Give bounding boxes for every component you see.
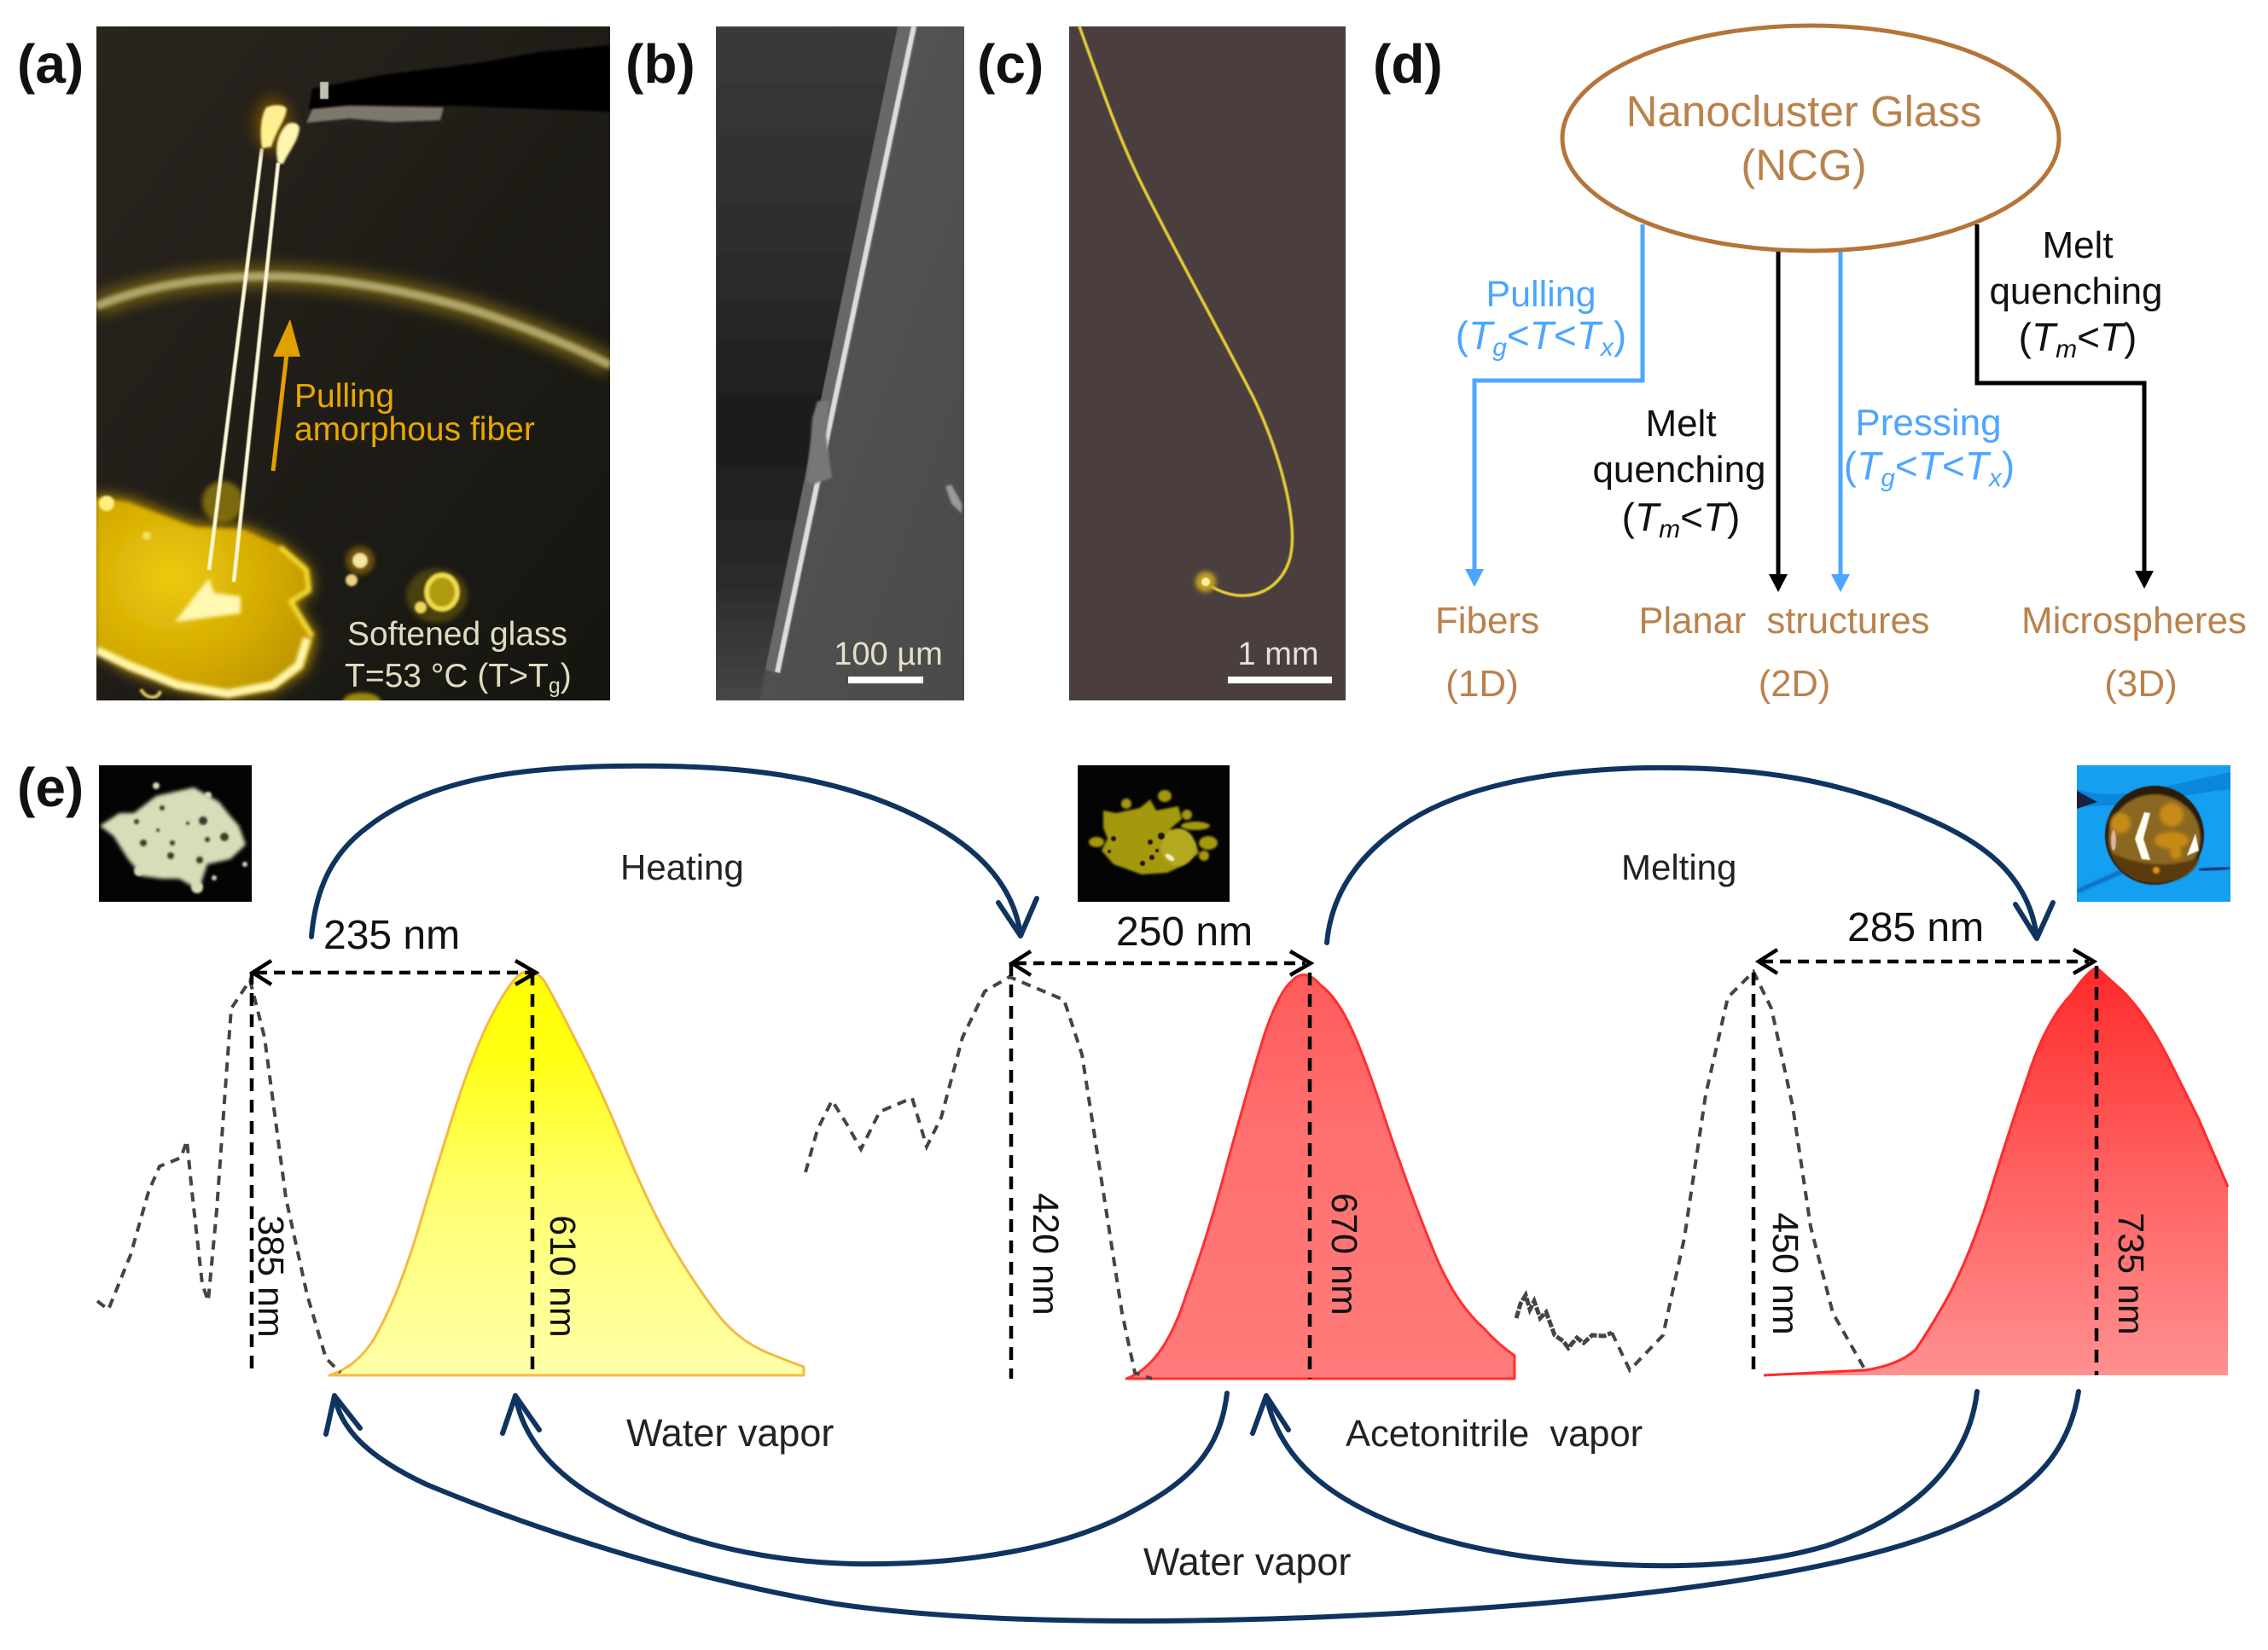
output: fibers 1D: (1D) (1445, 663, 1519, 705)
thumbnail: glass disc on blue glove (2077, 765, 2230, 902)
panel label (a): (a) (17, 33, 84, 95)
arrow: pulling direction (273, 319, 300, 471)
annotation: pulling amorphous fiber: amorphous fiber (294, 411, 535, 448)
label: 250 nm: 250 nm (1116, 909, 1253, 955)
ellipse: Nanocluster Glass: Nanocluster Glass (1626, 87, 1981, 136)
label: pulling condition: (T (1456, 313, 1492, 357)
arrow: melt quenching to microspheres (1977, 224, 2154, 589)
arrow: pressing to planar structures (1831, 252, 1850, 592)
panel d: NCG processing flowchart (1435, 26, 2247, 705)
label: melt quenching left: Melt (1645, 403, 1717, 444)
label: pulling condition: g (1492, 334, 1507, 362)
label: pressing condition: ) (2002, 444, 2015, 488)
arrow: melting (1327, 768, 2053, 943)
scale bar 1 mm (1228, 642, 1332, 683)
scale bar 1 mm: 1 mm (1237, 636, 1319, 672)
arrow: water vapor, outer return (326, 1391, 2079, 1621)
output: planar structures 2D: Planar structures (1639, 601, 1929, 642)
label: pulling condition: ) (1614, 313, 1626, 357)
guide lines: peak wavelength markers (252, 963, 2096, 1379)
panel a: photo of fiber pulled from softened glass (96, 26, 610, 710)
arrow: 250 nm Stokes shift (1012, 951, 1311, 975)
label: pressing condition: x (1987, 464, 2003, 492)
spectrum: NCG 1 excitation (dashed) (97, 980, 340, 1373)
label: pressing condition: g (1881, 464, 1895, 492)
label: melt quenching right: < (2077, 315, 2100, 359)
label: pressing condition: (T (1844, 444, 1881, 488)
arrow: melt quenching to planar structures (1769, 252, 1788, 592)
label: 670 nm: 670 nm (1323, 1193, 1364, 1316)
annotation: pulling amorphous fiber: Pulling (294, 378, 394, 415)
ellipse: Nanocluster Glass (1562, 26, 2059, 251)
output: microspheres 3D: (3D) (2104, 663, 2178, 705)
label: pressing condition: < (1895, 444, 1918, 488)
panel label (b): (b) (625, 33, 695, 95)
arrow: water vapor, red to yellow (503, 1393, 1227, 1564)
arrow: pulling to fibers (1465, 224, 1643, 587)
label: water vapor lower: Water vapor (1143, 1540, 1351, 1583)
label: pulling condition: x (1599, 334, 1614, 362)
label: 610 nm: 610 nm (542, 1215, 583, 1338)
label: acetonitrile vapor: Acetonitrile vapor (1346, 1414, 1643, 1455)
output: microspheres 3D: Microspheres (2021, 600, 2247, 642)
scale bar 100 µm: 100 µm (834, 636, 943, 672)
label: melt quenching left: quenching (1592, 449, 1766, 491)
label: 735 nm: 735 nm (2110, 1212, 2151, 1335)
label: 450 nm: 450 nm (1765, 1212, 1806, 1335)
label: 420 nm: 420 nm (1025, 1193, 1066, 1316)
panel label (e): (e) (17, 757, 84, 818)
label: 235 nm: 235 nm (323, 913, 460, 958)
label: melt quenching left: (T (1622, 495, 1659, 539)
panel label (c): (c) (977, 33, 1044, 95)
label: melting: Melting (1621, 847, 1736, 887)
thumbnail: yellow powder (1078, 765, 1230, 902)
output: planar structures 2D: (2D) (1759, 664, 1830, 705)
panel e: spectra and transitions (97, 765, 2230, 1621)
spectrum: NCG 2 excitation (dashed) (805, 977, 1152, 1379)
spectrum: NCG 2 emission (red) (1126, 975, 1515, 1379)
label: melt quenching left: < (1680, 495, 1703, 539)
label: melt quenching right: T) (2100, 315, 2137, 359)
label: melt quenching right: Melt (2042, 224, 2114, 266)
spectrum: NCG 1 emission (yellow) (329, 971, 804, 1375)
panel c: photo of luminescent fiber (1069, 26, 1346, 700)
label: melt quenching right: (T (2019, 315, 2056, 359)
thumbnail: white powder (99, 765, 252, 902)
label: melt quenching right: quenching (1989, 270, 2163, 312)
label: melt quenching left: m (1659, 515, 1680, 543)
annotation: softened glass temperature: ) (561, 658, 572, 694)
arrow: heating (311, 766, 1037, 937)
label: pulling condition: T<T (1530, 313, 1601, 357)
arrow: acetonitrile vapor (1253, 1391, 1977, 1566)
label: pulling condition: Pulling (1486, 274, 1596, 315)
panel b: SEM image of fiber (716, 26, 964, 700)
label: 385 nm: 385 nm (250, 1215, 291, 1338)
label: melt quenching right: m (2056, 335, 2077, 363)
label: melt quenching left: T) (1703, 495, 1740, 539)
annotation: softened glass temperature: g (549, 674, 561, 698)
label: pressing condition: T<T (1918, 444, 1989, 488)
label: pulling condition: < (1507, 313, 1530, 357)
annotation: softened glass temperature: Softened glass (347, 616, 567, 653)
label: 285 nm: 285 nm (1847, 905, 1984, 950)
label: pressing condition: Pressing (1855, 402, 2002, 444)
label: water vapor: Water vapor (626, 1411, 834, 1455)
arrow: 285 nm Stokes shift (1759, 950, 2094, 973)
label: heating: Heating (620, 847, 744, 887)
arrow: 235 nm Stokes shift (253, 961, 536, 985)
ellipse: Nanocluster Glass: (NCG) (1741, 141, 1867, 189)
scale bar 100 µm (836, 642, 940, 683)
panel label (d): (d) (1373, 33, 1443, 95)
spectrum: NCG 3 emission (red) (1764, 967, 2228, 1375)
spectrum: NCG 3 excitation (dashed) (1516, 972, 1865, 1370)
annotation: softened glass temperature: T=53 °C (T>T (345, 658, 549, 694)
output: fibers 1D: Fibers (1435, 600, 1539, 642)
